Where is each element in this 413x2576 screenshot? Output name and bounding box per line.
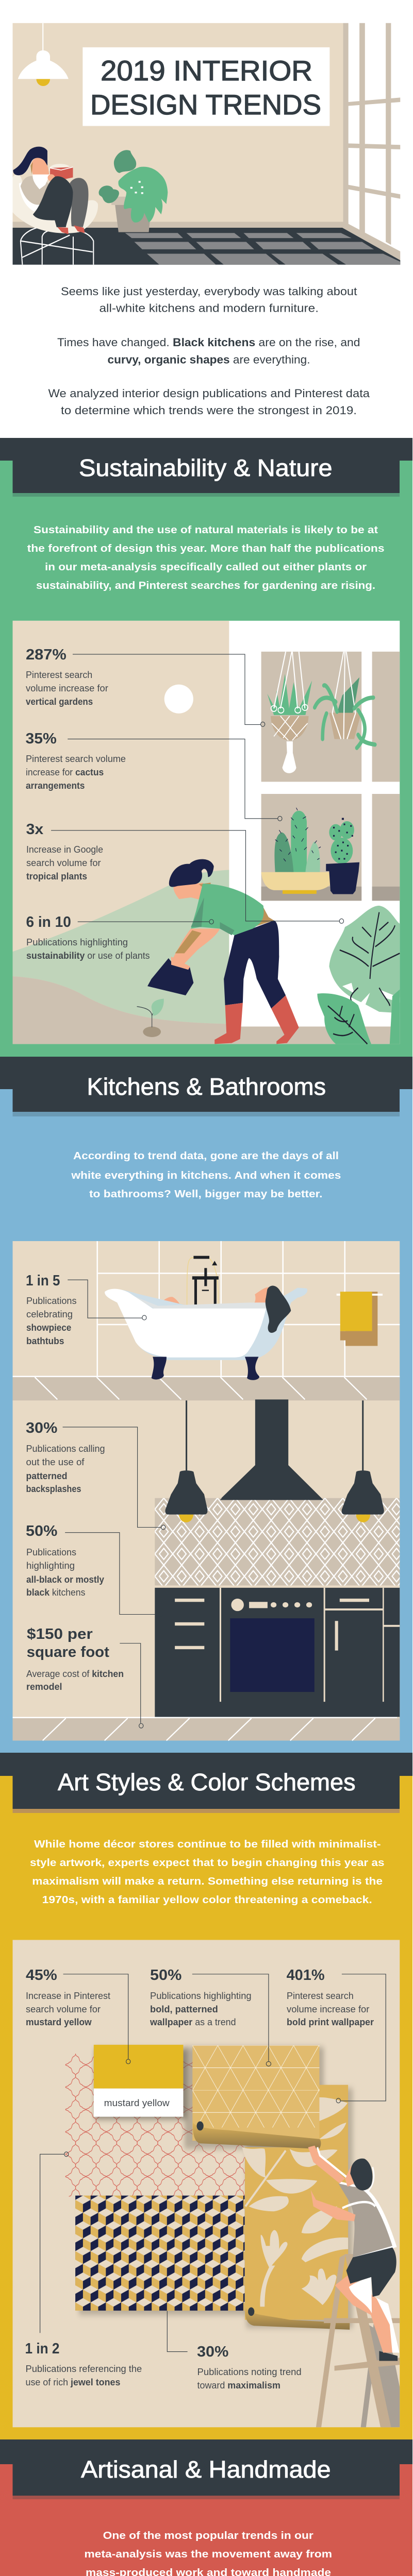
section heading: Sustainability & Nature bbox=[79, 454, 332, 481]
stats: sustainability: 287% bbox=[26, 647, 67, 663]
section intro bbox=[30, 1839, 385, 1906]
intro text: Seems like just yesterday, everybody was talking about bbox=[61, 285, 357, 298]
icon: hanging plant bbox=[315, 652, 375, 748]
intro text: We analyzed interior design publications and Pinterest data bbox=[48, 387, 370, 400]
section heading bbox=[0, 2439, 412, 2499]
panel: wallpaper illustration bbox=[13, 1940, 400, 2427]
icon: hanging macrame planter bbox=[267, 652, 312, 773]
section intro: meta-analysis was the movement away from bbox=[84, 2549, 332, 2560]
stats: sustainability: 35% bbox=[26, 731, 57, 747]
section heading: Art Styles & Color Schemes bbox=[58, 1769, 356, 1795]
stats: art styles: Publications noting trend bbox=[197, 2367, 302, 2377]
triangle wallpaper bbox=[192, 2045, 321, 2149]
title bbox=[82, 47, 329, 126]
stats: art styles: use of rich jewel tones bbox=[26, 2377, 120, 2387]
patterned backsplash bbox=[155, 1465, 400, 1585]
stats: kitchens and bathrooms: celebrating bbox=[26, 1309, 73, 1319]
stats: art styles: 1 in 2 bbox=[25, 2341, 60, 2357]
section: kitchens and bathrooms bbox=[0, 1057, 412, 1753]
stats: art styles: 50% bbox=[150, 1967, 182, 1984]
callout lines bbox=[51, 654, 343, 924]
icon: bathtub with woman bbox=[105, 1286, 307, 1380]
stats: art styles: wallpaper as a trend bbox=[150, 2017, 236, 2027]
gardener woman bbox=[147, 859, 299, 1044]
stats: kitchens and bathrooms: 50% bbox=[26, 1523, 58, 1539]
stats: kitchens and bathrooms: Publications calling bbox=[26, 1444, 105, 1454]
callout lines bbox=[63, 1280, 166, 1728]
icon: cacti in bowl bbox=[261, 808, 338, 894]
section intro: One of the most popular trends in our bbox=[103, 2530, 313, 2541]
stats: kitchens and bathrooms: $150 per bbox=[27, 1626, 93, 1642]
stats: sustainability: arrangements bbox=[26, 781, 85, 791]
icon: faucet bbox=[187, 1256, 219, 1305]
section heading: Artisanal & Handmade bbox=[81, 2456, 331, 2483]
stats: kitchens and bathrooms: patterned bbox=[26, 1471, 67, 1481]
section: artisanal and handmade bbox=[0, 2439, 412, 2576]
window panes bbox=[261, 652, 400, 901]
section intro: the forefront of design this year. More than half the publications bbox=[27, 543, 385, 554]
section intro: According to trend data, gone are the days of all bbox=[73, 1150, 339, 1162]
swatch bbox=[94, 2045, 183, 2117]
monstera leaves bbox=[317, 906, 400, 1044]
stats: kitchens and bathrooms bbox=[26, 1273, 124, 1692]
icon: round cactus in navy pot bbox=[326, 818, 359, 894]
stats: kitchens and bathrooms: showpiece bbox=[26, 1323, 71, 1333]
section heading bbox=[0, 438, 412, 497]
stats: art styles: bold print wallpaper bbox=[287, 2017, 374, 2027]
stats: sustainability: tropical plants bbox=[26, 871, 87, 882]
section intro: in our meta-analysis specifically called out either plants or bbox=[45, 562, 367, 573]
stats: art styles: volume increase for bbox=[287, 2004, 369, 2014]
black kitchen cabinets bbox=[155, 1588, 400, 1717]
intro text: curvy, organic shapes are everything. bbox=[107, 353, 310, 366]
panel: plants illustration bbox=[13, 621, 400, 1044]
tall botanical wallpaper bbox=[242, 2085, 350, 2330]
section heading bbox=[0, 1753, 412, 1813]
stats: sustainability: sustainability or use of plants bbox=[26, 951, 150, 961]
stats: kitchens and bathrooms: backsplashes bbox=[26, 1484, 81, 1494]
stats: art styles: 45% bbox=[26, 1967, 57, 1984]
tile wall bbox=[96, 1241, 400, 1377]
callout lines bbox=[40, 1974, 386, 2352]
stats: sustainability: vertical gardens bbox=[26, 697, 93, 707]
stats: art styles: Publications referencing the bbox=[26, 2364, 142, 2374]
section intro bbox=[27, 524, 385, 591]
stats: art styles: search volume for bbox=[26, 2004, 101, 2014]
stats: art styles: Publications highlighting bbox=[150, 1991, 252, 2001]
stats: art styles: 401% bbox=[287, 1967, 325, 1984]
title text bbox=[90, 55, 321, 121]
woman reading on chair bbox=[13, 147, 98, 265]
intro text: all-white kitchens and modern furniture. bbox=[99, 302, 319, 314]
icon: towel bbox=[337, 1292, 383, 1346]
stats: sustainability bbox=[26, 647, 150, 961]
section heading: Kitchens & Bathrooms bbox=[87, 1073, 326, 1100]
section intro: style artwork, experts expect that to begin changing this year as bbox=[30, 1857, 385, 1869]
icon: pendant lamp bbox=[18, 23, 69, 86]
man on ladder bbox=[308, 2146, 400, 2427]
intro text bbox=[48, 285, 370, 417]
stats: sustainability: Pinterest search volume bbox=[26, 754, 126, 764]
section intro bbox=[84, 2530, 332, 2576]
section: sustainability and nature bbox=[0, 438, 412, 1057]
stats: kitchens and bathrooms: highlighting bbox=[26, 1561, 75, 1571]
stats: sustainability: 3x bbox=[26, 821, 43, 838]
stats: kitchens and bathrooms: Average cost of kitchen bbox=[26, 1669, 124, 1679]
section intro: 1970s, with a familiar yellow color threatening a comeback. bbox=[42, 1894, 372, 1906]
intro text: to determine which trends were the strongest in 2019. bbox=[61, 404, 357, 417]
stats: art styles: bold, patterned bbox=[150, 2004, 218, 2014]
icon: kitchen hood and pendants bbox=[165, 1399, 384, 1522]
section: art styles and color schemes bbox=[0, 1753, 412, 2439]
potted monstera bbox=[99, 150, 168, 232]
hero illustration bbox=[13, 23, 400, 265]
stats: sustainability: search volume for bbox=[26, 858, 101, 868]
stats: sustainability: 6 in 10 bbox=[26, 914, 71, 930]
stats: sustainability: volume increase for bbox=[26, 683, 108, 693]
stats: kitchens and bathrooms: 1 in 5 bbox=[26, 1273, 60, 1289]
red trellis pattern bbox=[65, 2054, 245, 2197]
stats: kitchens and bathrooms: out the use of bbox=[26, 1457, 85, 1467]
section intro: sustainability, and Pinterest searches for gardening are rising. bbox=[36, 580, 375, 591]
section intro bbox=[71, 1150, 341, 1200]
stats: art styles: mustard yellow bbox=[104, 2098, 170, 2108]
stats: art styles: 30% bbox=[197, 2344, 229, 2360]
stats: sustainability: increase for cactus bbox=[26, 767, 104, 777]
stats: sustainability: Publications highlighting bbox=[26, 937, 128, 947]
section intro: to bathrooms? Well, bigger may be better. bbox=[89, 1189, 323, 1200]
stats: kitchens and bathrooms: all-black or mostly bbox=[26, 1574, 104, 1585]
stats: sustainability: Increase in Google bbox=[26, 844, 103, 855]
section intro: While home décor stores continue to be filled with minimalist- bbox=[34, 1839, 381, 1850]
stats: art styles: Increase in Pinterest bbox=[26, 1991, 110, 2001]
stats: art styles: mustard yellow bbox=[26, 2017, 92, 2027]
stats: kitchens and bathrooms: bathtubs bbox=[26, 1336, 64, 1346]
title text: DESIGN TRENDS bbox=[90, 89, 321, 121]
stats: art styles: toward maximalism bbox=[197, 2380, 280, 2391]
section heading bbox=[0, 1057, 412, 1116]
geometric cube pattern bbox=[75, 2196, 244, 2311]
intro text: Times have changed. Black kitchens are on the rise, and bbox=[57, 336, 360, 349]
icon: sprout bbox=[137, 998, 164, 1037]
panel: bathroom and kitchen illustration bbox=[13, 1241, 400, 1740]
stats: kitchens and bathrooms: Publications bbox=[26, 1547, 76, 1557]
stats: kitchens and bathrooms: square foot bbox=[27, 1644, 109, 1660]
stats: kitchens and bathrooms: Publications bbox=[26, 1296, 76, 1306]
stats: art styles bbox=[25, 1967, 374, 2391]
stats: art styles: Pinterest search bbox=[287, 1991, 354, 2001]
stats: kitchens and bathrooms: remodel bbox=[26, 1682, 62, 1692]
stats: kitchens and bathrooms: black kitchens bbox=[26, 1587, 85, 1598]
section intro: white everything in kitchens. And when it comes bbox=[71, 1170, 341, 1181]
stats: sustainability: Pinterest search bbox=[26, 670, 92, 680]
title text: 2019 INTERIOR bbox=[101, 55, 312, 87]
section intro: maximalism will make a return. Something else returning is the bbox=[32, 1876, 383, 1887]
section intro: Sustainability and the use of natural materials is likely to be at bbox=[34, 524, 378, 536]
stats: kitchens and bathrooms: 30% bbox=[26, 1420, 58, 1436]
